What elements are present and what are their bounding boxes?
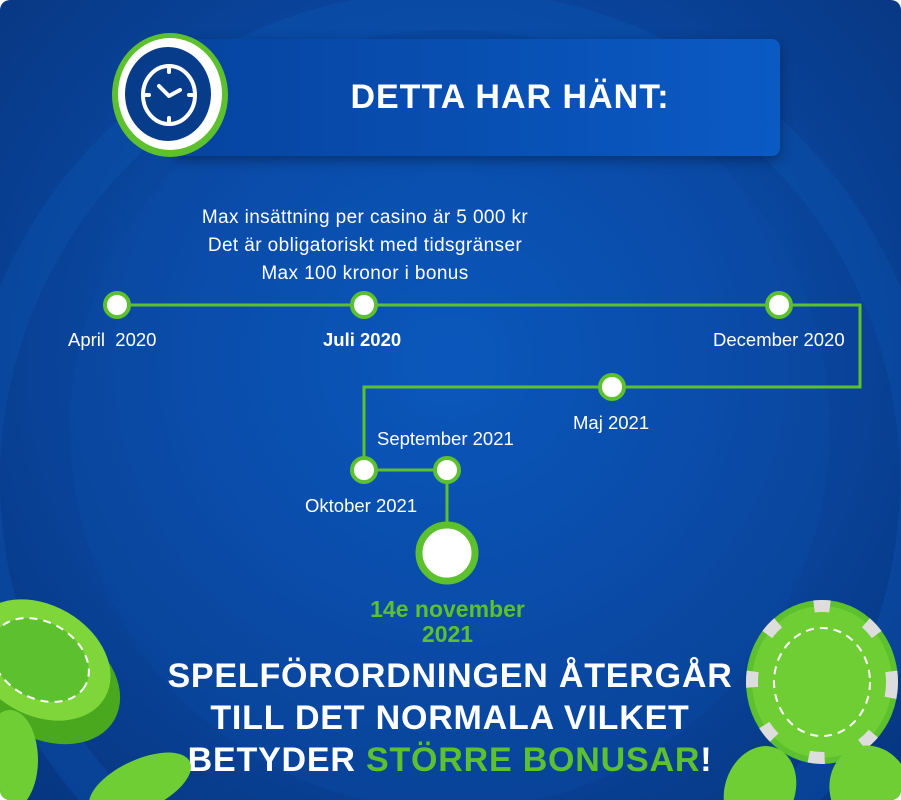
text block: July changes: Max 100 kronor i bonus xyxy=(261,263,469,284)
title: DETTA HAR HÄNT: xyxy=(350,78,670,116)
final date xyxy=(370,596,525,647)
conclusion xyxy=(167,656,733,779)
icon: clock badge xyxy=(112,33,228,157)
text: December 2020 xyxy=(713,329,845,350)
text: Maj 2021 xyxy=(573,412,649,433)
text block: July changes: Max insättning per casino är 5 000 kr xyxy=(202,207,528,228)
header banner xyxy=(175,39,780,156)
conclusion: TILL DET NORMALA VILKET xyxy=(210,699,690,737)
labels: April 2020 xyxy=(68,329,156,350)
text: Oktober 2021 xyxy=(305,495,417,516)
final date: 2021 xyxy=(422,621,473,647)
final date: 14e november xyxy=(370,596,525,622)
text block: July changes: Det är obligatoriskt med tidsgränser xyxy=(208,235,522,256)
conclusion: BETYDER STÖRRE BONUSAR! xyxy=(188,741,712,779)
text: September 2021 xyxy=(377,428,514,449)
text block: July changes xyxy=(202,207,528,284)
text: Juli 2020 xyxy=(323,329,401,350)
conclusion: SPELFÖRORDNINGEN ÅTERGÅR xyxy=(167,657,733,695)
